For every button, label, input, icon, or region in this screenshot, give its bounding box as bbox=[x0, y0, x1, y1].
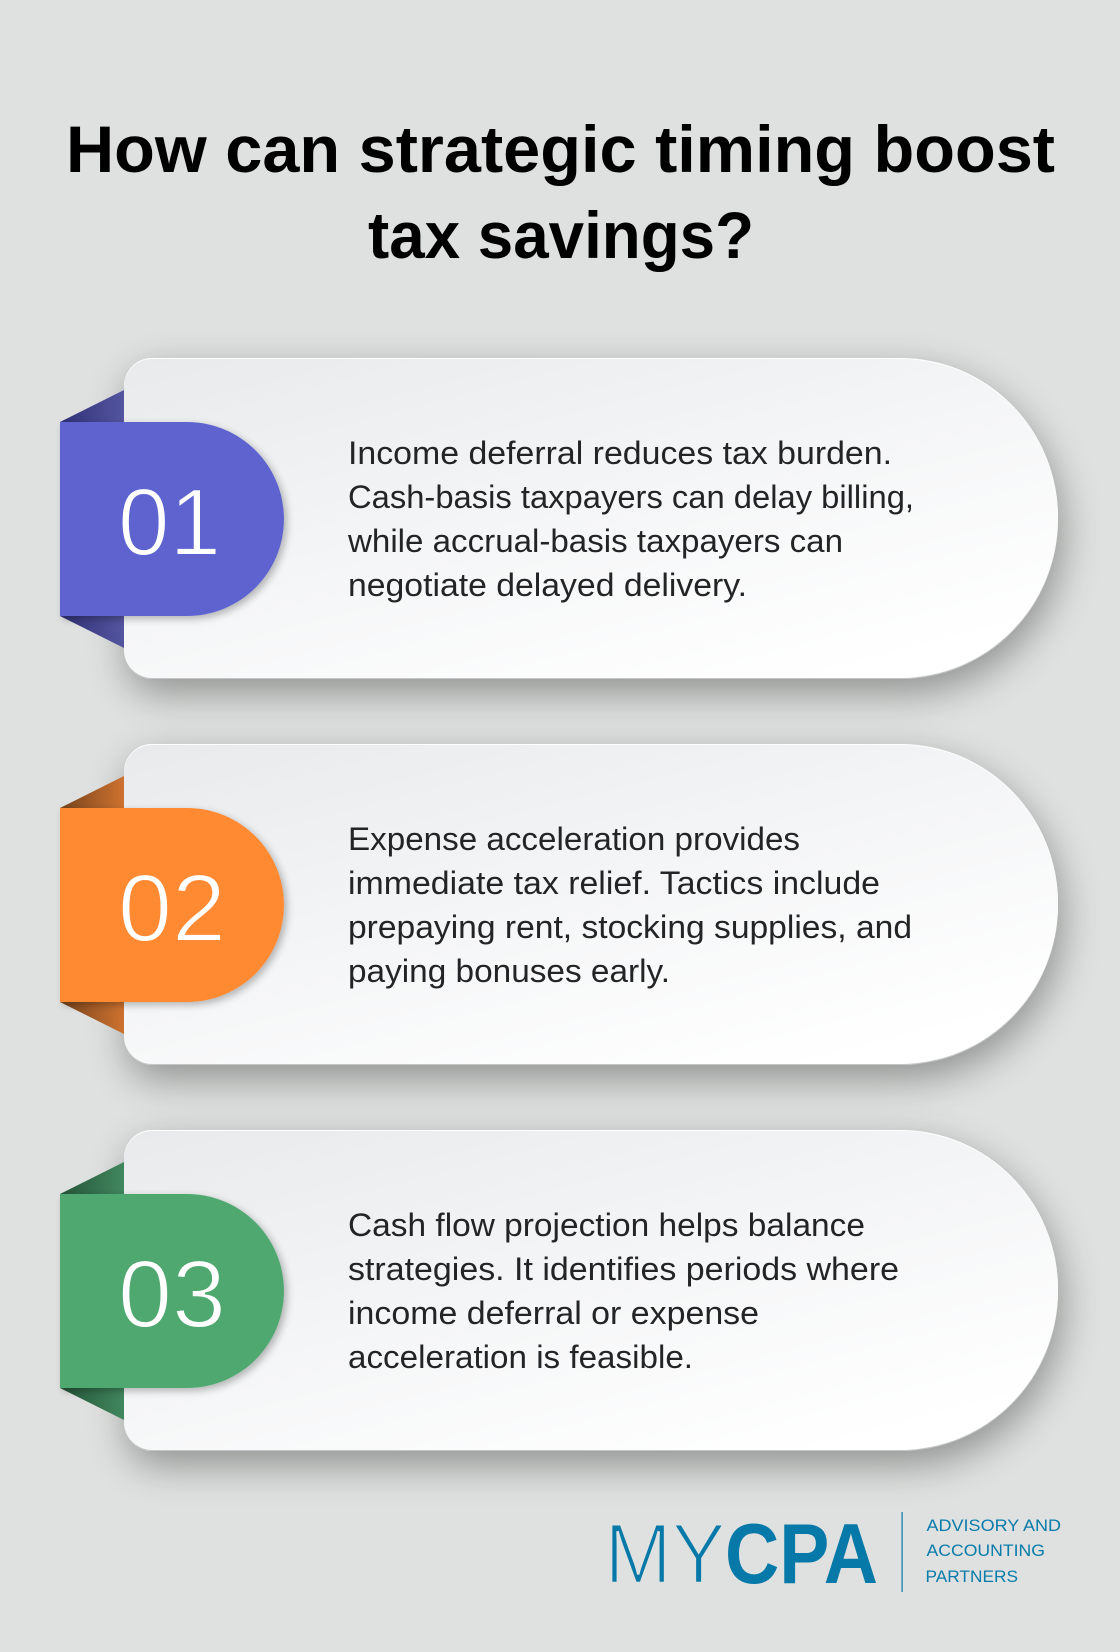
number 02: 02 bbox=[118, 855, 226, 962]
card background 02 bbox=[124, 744, 1058, 1065]
text block 02 bbox=[348, 821, 912, 989]
text block 02: immediate tax relief. Tactics include bbox=[348, 865, 880, 901]
card background 03 bbox=[124, 1130, 1058, 1451]
panel: step 03 bbox=[60, 1130, 1058, 1451]
text block 03: acceleration is feasible. bbox=[348, 1339, 693, 1375]
title bbox=[66, 112, 1055, 272]
card background 01 bbox=[124, 358, 1058, 679]
badge 01 bbox=[60, 422, 284, 616]
panel: step 02 bbox=[60, 744, 1058, 1065]
logo wordmark: MY bbox=[604, 1507, 726, 1602]
text block 02: paying bonuses early. bbox=[348, 953, 670, 989]
logo tagline: PARTNERS bbox=[926, 1568, 1018, 1586]
title: tax savings? bbox=[368, 198, 754, 272]
text block 03: Cash flow projection helps balance bbox=[348, 1207, 865, 1243]
text block 02: prepaying rent, stocking supplies, and bbox=[348, 909, 912, 945]
text block 03 bbox=[348, 1207, 899, 1375]
ribbon folds 03 bbox=[60, 1162, 124, 1420]
number 01: 01 bbox=[118, 469, 221, 576]
logo: MYCPA bbox=[604, 1507, 1061, 1602]
badge 03 bbox=[60, 1194, 284, 1388]
text block 01 bbox=[347, 435, 914, 603]
text block 01: negotiate delayed delivery. bbox=[348, 567, 747, 603]
text block 03: strategies. It identifies periods where bbox=[348, 1251, 899, 1287]
logo wordmark bbox=[604, 1507, 878, 1602]
badge 02 bbox=[60, 808, 284, 1002]
text block 02: Expense acceleration provides bbox=[348, 821, 800, 857]
ribbon folds 02 bbox=[60, 776, 124, 1034]
text block 03: income deferral or expense bbox=[348, 1295, 759, 1331]
title: How can strategic timing boost bbox=[66, 112, 1055, 186]
logo divider bbox=[902, 1512, 903, 1592]
logo wordmark: CPA bbox=[725, 1507, 878, 1602]
text block 01: Income deferral reduces tax burden. bbox=[348, 435, 892, 471]
text block 01: Cash-basis taxpayers can delay billing, bbox=[348, 479, 914, 515]
text block 01: while accrual-basis taxpayers can bbox=[347, 523, 843, 559]
logo tagline bbox=[926, 1517, 1061, 1586]
ribbon folds 01 bbox=[60, 390, 124, 648]
logo tagline: ADVISORY AND bbox=[926, 1517, 1061, 1535]
panel: step 01 bbox=[60, 358, 1058, 679]
number 03: 03 bbox=[118, 1241, 226, 1348]
logo tagline: ACCOUNTING bbox=[926, 1542, 1045, 1560]
